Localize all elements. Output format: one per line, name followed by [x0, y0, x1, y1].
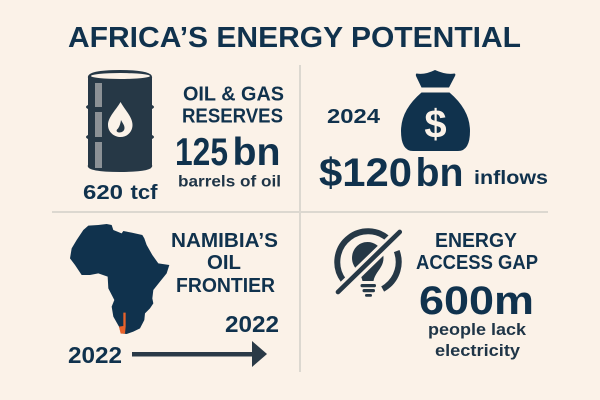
- panel: energy access gap: [325, 219, 538, 360]
- heading line: frontier: FRONTIER: [176, 275, 276, 297]
- stat: 620 tcf: [83, 182, 158, 204]
- stat: $120 bn: bn: [416, 151, 464, 195]
- title: AFRICA’S ENERGY POTENTIAL: [68, 22, 521, 54]
- caption: inflows: inflows: [474, 168, 548, 189]
- caption: barrels of oil: barrels of oil: [178, 174, 281, 190]
- dollar sign on bag: $: [424, 102, 447, 146]
- heading line: oil: OIL: [207, 252, 241, 274]
- stat: 125 bn: [175, 131, 280, 174]
- panel: investment inflows: [319, 70, 548, 195]
- panel: Namibia's oil frontier: [68, 224, 279, 368]
- stat: $120 bn: $120: [319, 151, 412, 195]
- caption: people lack: people lack: [428, 321, 527, 339]
- stat: 125 bn: bn: [232, 131, 280, 174]
- panel: oil and gas reserves: [83, 70, 284, 204]
- heading line: access gap: ACCESS GAP: [416, 252, 538, 274]
- icon: money bag: [401, 70, 470, 151]
- stat: 125 bn: 125: [175, 131, 228, 174]
- year: end: 2022: [225, 311, 279, 337]
- caption: electricity: electricity: [435, 342, 521, 360]
- label: 2024: 2024: [327, 106, 381, 128]
- arrow: timeline: [132, 341, 267, 367]
- stat: 620 tcf: tcf: [130, 182, 158, 204]
- heading line: energy: ENERGY: [435, 230, 518, 252]
- stat: 600m: 600m: [419, 279, 534, 323]
- icon: map of Africa: [70, 224, 169, 334]
- stat: 620 tcf: 620: [83, 182, 123, 204]
- stat: $120 bn: [319, 151, 464, 195]
- label: oil and gas: OIL & GAS: [183, 84, 284, 106]
- icon: oil barrel: [86, 70, 154, 172]
- Namibia highlight: [119, 313, 126, 334]
- label: reserves: RESERVES: [182, 106, 283, 128]
- heading line: Namibia's: NAMIBIA’S: [171, 230, 278, 252]
- year: start: 2022: [68, 342, 122, 368]
- icon: crossed-out light bulb: [325, 219, 411, 305]
